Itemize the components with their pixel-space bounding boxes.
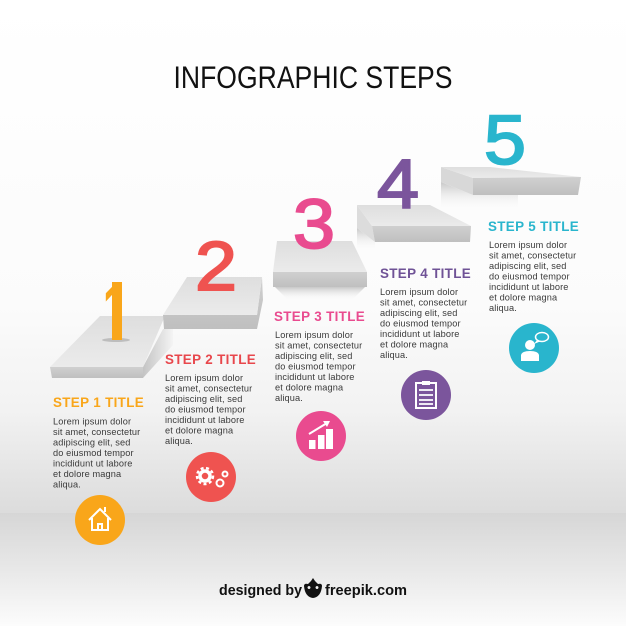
step 5 icon: person with speech bubble [509, 323, 559, 373]
step 1 text: Lorem ipsum dolor [53, 416, 131, 426]
step 4 text: adipiscing elit, sed [380, 308, 457, 318]
step 1 icon: house [75, 495, 125, 545]
step 1 text: do eiusmod tempor [53, 448, 134, 458]
step 2 number: 2 [195, 227, 237, 305]
step 4 platform [357, 205, 471, 250]
step 4 text: do eiusmod tempor [380, 318, 461, 328]
step 1 text: aliqua. [53, 480, 81, 490]
step 2 text: sit amet, consectetur [165, 384, 252, 394]
step 4 title: STEP 4 TITLE [380, 266, 471, 281]
step 3 title: STEP 3 TITLE [274, 309, 365, 324]
step 4 icon: clipboard [401, 370, 451, 420]
step 5 platform [441, 167, 581, 210]
step 3 number: 3 [293, 185, 335, 263]
step 5 text: sit amet, consectetur [489, 250, 576, 260]
step 2 text: do eiusmod tempor [165, 404, 246, 414]
step 2 text: et dolore magna [165, 426, 234, 436]
step 5 title: STEP 5 TITLE [488, 219, 579, 234]
step 4 text: aliqua. [380, 350, 408, 360]
step 3 text: sit amet, consectetur [275, 340, 362, 350]
step 3 text: adipiscing elit, sed [275, 351, 352, 361]
step 5 text: do eiusmod tempor [489, 272, 570, 282]
step 1 number: 1 [102, 271, 128, 349]
step 2 text: Lorem ipsum dolor [165, 373, 243, 383]
step 5 text: adipiscing elit, sed [489, 261, 566, 271]
step 4 number: 4 [377, 145, 419, 223]
step 4 text: incididunt ut labore [380, 329, 460, 339]
step 1 text: incididunt ut labore [53, 458, 133, 468]
footer credit: freepik.com [325, 583, 407, 599]
step 5 text: et dolore magna [489, 292, 558, 302]
step 2 text: aliqua. [165, 436, 193, 446]
step 4 text: Lorem ipsum dolor [380, 287, 458, 297]
step 3 icon: growth chart [296, 411, 346, 461]
step 1 text: sit amet, consectetur [53, 427, 140, 437]
step 3 platform [273, 241, 367, 300]
step 2 title: STEP 2 TITLE [165, 352, 256, 367]
step 4 text: sit amet, consectetur [380, 298, 467, 308]
footer credit [219, 578, 407, 599]
step 5 text: aliqua. [489, 303, 517, 313]
step 3 text: aliqua. [275, 393, 303, 403]
step 2 text: incididunt ut labore [165, 415, 245, 425]
footer credit: designed by [219, 583, 302, 599]
step 3 text: do eiusmod tempor [275, 362, 356, 372]
step 4 text: et dolore magna [380, 340, 449, 350]
step 1 number [102, 282, 130, 342]
background floor [0, 513, 626, 626]
step 3 text: et dolore magna [275, 382, 344, 392]
step 3 text: Lorem ipsum dolor [275, 330, 353, 340]
step 1 platform [50, 316, 173, 378]
step 1 text: adipiscing elit, sed [53, 438, 130, 448]
step 2 platform [163, 277, 263, 329]
step 2 icon: gears [186, 452, 236, 502]
step 5 text: Lorem ipsum dolor [489, 240, 567, 250]
icon: freepik logo [304, 578, 322, 598]
step 5 text: incididunt ut labore [489, 282, 569, 292]
step 3 text: incididunt ut labore [275, 372, 355, 382]
title: INFOGRAPHIC STEPS [174, 59, 452, 95]
step 1 text: et dolore magna [53, 469, 122, 479]
step 2 text: adipiscing elit, sed [165, 394, 242, 404]
step 5 number: 5 [484, 101, 526, 179]
step 1 title: STEP 1 TITLE [53, 395, 144, 410]
